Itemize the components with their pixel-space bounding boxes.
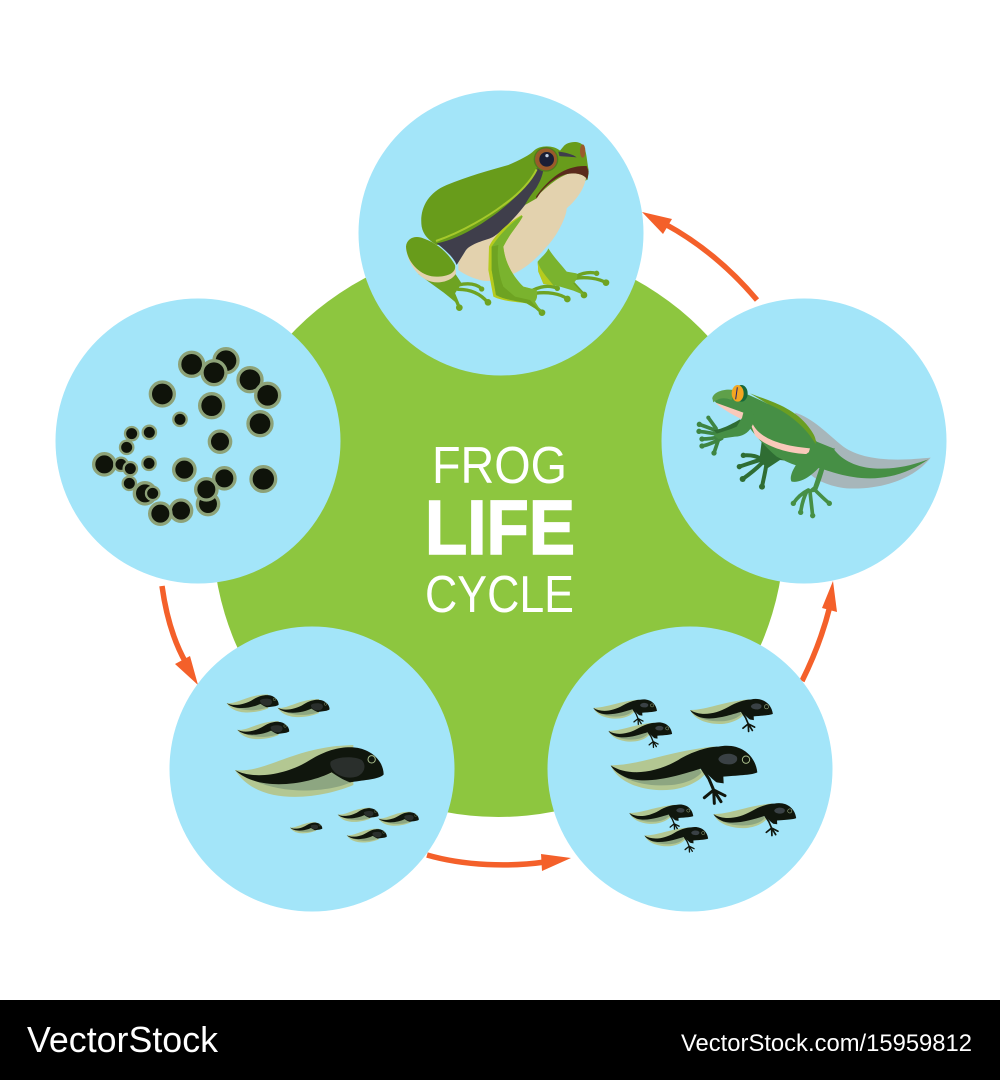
panel: frog eggs: [56, 298, 340, 584]
title: Frog Life Cycle: CYCLE: [425, 566, 574, 624]
footer bar: [0, 1000, 1000, 1080]
panel: tadpoles: [170, 626, 454, 912]
arrow: tadpole with legs to froglet: [802, 581, 837, 681]
footer brand: VectorStock: [27, 1019, 219, 1060]
central green circle: [212, 245, 784, 817]
icon: group of tadpoles with legs: [593, 699, 796, 852]
arrow: tadpole to tadpole with legs: [427, 854, 571, 871]
icon: adult frog: [406, 142, 609, 316]
icon: group of tadpoles: [227, 694, 419, 843]
icon: froglet: [696, 385, 931, 518]
title: Frog Life Cycle: [425, 437, 575, 624]
icon: cluster of eggs: [94, 349, 280, 524]
title: Frog Life Cycle: FROG: [432, 437, 567, 495]
panel: adult frog: [358, 90, 644, 376]
arrow: froglet to adult frog: [642, 212, 757, 300]
arrow: eggs to tadpole: [162, 586, 198, 685]
panel: tadpoles with hind legs: [548, 626, 832, 912]
footer image id: VectorStock.com/15959812: [681, 1030, 972, 1057]
panel: froglet with tail: [662, 298, 946, 584]
title: Frog Life Cycle: LIFE: [425, 485, 575, 571]
